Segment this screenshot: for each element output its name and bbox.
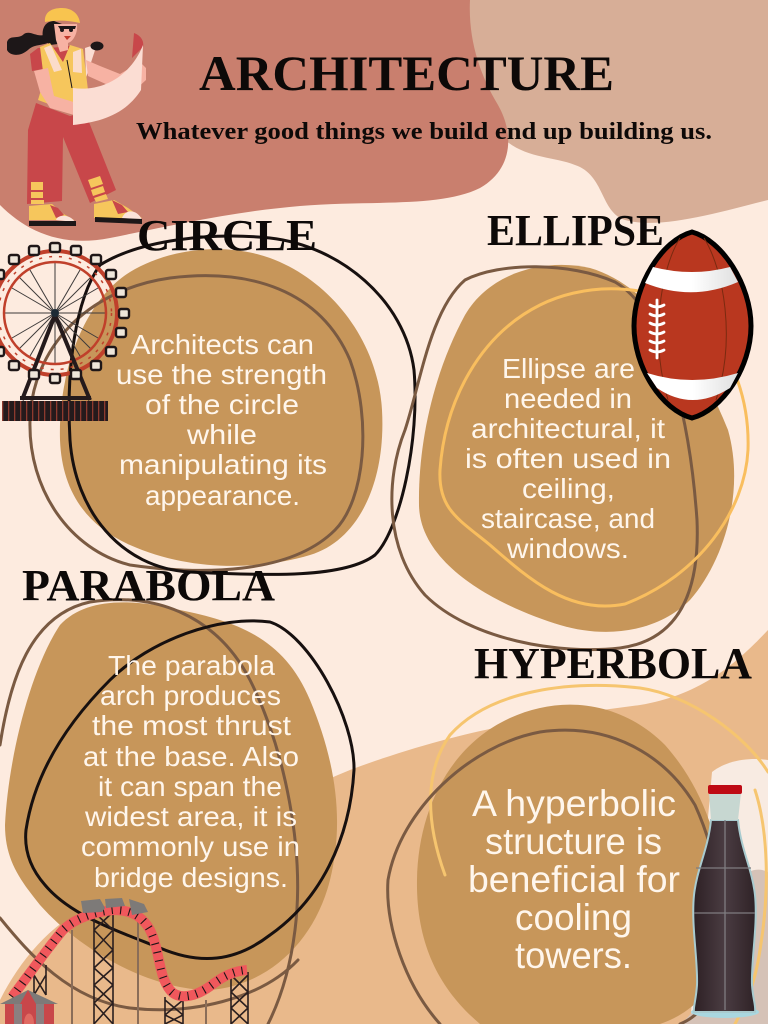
circle body text: while (186, 419, 257, 450)
parabola heading: PARABOLA (22, 561, 275, 610)
parabola outline: brown (0, 600, 298, 1024)
wheel base (2, 401, 108, 421)
ball body (634, 232, 751, 418)
icon: roller coaster (0, 898, 248, 1024)
blueprint (132, 33, 143, 58)
bottle bands (694, 820, 755, 1010)
coaster support poles (72, 918, 206, 1024)
left arm (34, 68, 84, 115)
parabola body text: The parabola (108, 650, 275, 681)
hyperbola heading: HYPERBOLA (474, 639, 752, 688)
subtitle: Whatever good things we build end up building us. (136, 119, 712, 145)
panel: circle (30, 211, 415, 574)
hyperbola outline: brown (388, 730, 722, 1024)
hyperbola blob (417, 705, 725, 1024)
panel: hyperbola (388, 639, 768, 1024)
ellipse body text: architectural, it (471, 413, 665, 444)
hyperbola body text: beneficial for (468, 859, 680, 900)
coaster towers (34, 912, 248, 1024)
coaster cars (81, 898, 148, 915)
circle outline: black (69, 236, 415, 574)
hyperbola body text: towers. (515, 935, 632, 976)
icon: architect worker (7, 8, 146, 226)
circle body text: of the circle (145, 389, 299, 420)
icon: ferris wheel (0, 243, 129, 421)
hyperbola body text (468, 783, 680, 976)
circle outline: brown (30, 276, 363, 570)
boots (29, 200, 142, 220)
circle blob (60, 249, 382, 566)
circle body text: use the strength (116, 359, 327, 390)
icon: football (634, 232, 751, 418)
panel: parabola (0, 561, 354, 1024)
circle body text: manipulating its (119, 449, 327, 480)
background shape: top right blush blob (464, 0, 768, 223)
circle heading: CIRCLE (137, 211, 317, 260)
hyperbola body text: cooling (515, 897, 632, 938)
vest (38, 43, 88, 113)
background shape: lower right grey blob (680, 870, 768, 1024)
bottle glass (693, 820, 756, 1012)
wheel rings (4, 262, 106, 364)
circle body text (116, 329, 327, 511)
ellipse body text: Ellipse are (502, 353, 635, 384)
ball seams (659, 238, 726, 400)
background shape: top left terracotta blob (0, 0, 508, 241)
parabola body text: arch produces (100, 680, 281, 711)
bottle neck (709, 793, 741, 820)
wheel spokes (4, 262, 106, 364)
parabola body text: it can span the (98, 771, 282, 802)
boot stripes (31, 176, 108, 204)
neck and face (54, 24, 77, 52)
ellipse body text: ceiling, (522, 473, 615, 504)
wheel gondolas (0, 243, 129, 383)
wheel support legs (20, 315, 91, 400)
bottle cap (708, 785, 742, 794)
rolled paper (85, 44, 97, 78)
hyperbola outline: yellow (431, 685, 768, 1024)
carnival tent (0, 990, 58, 1024)
parabola body text: widest area, it is (84, 801, 297, 832)
sleeve and shirt (30, 46, 70, 71)
circle body text: appearance. (145, 480, 300, 511)
parabola body text (81, 650, 300, 893)
ellipse outline: brown (392, 267, 697, 650)
panel: ellipse (392, 206, 748, 650)
ellipse body text: windows. (506, 533, 629, 564)
parabola outline: black (26, 621, 354, 959)
pants (27, 103, 116, 204)
hard hat (45, 8, 80, 23)
ellipse outline: yellow (440, 289, 748, 606)
title: ARCHITECTURE (199, 45, 614, 101)
parabola body text: commonly use in (81, 831, 300, 862)
ellipse body text: is often used in (465, 443, 671, 474)
circle body text: Architects can (131, 329, 314, 360)
ball stripes (645, 267, 738, 292)
hyperbola body text: A hyperbolic (472, 783, 676, 824)
ball laces (650, 300, 664, 358)
ellipse body text: needed in (504, 383, 632, 414)
bottle shadow base (691, 1006, 759, 1018)
background shape: lower tan wave (0, 630, 768, 1024)
ellipse heading: ELLIPSE (487, 206, 664, 255)
parabola body text: bridge designs. (94, 862, 288, 893)
hyperbola body text: structure is (485, 821, 662, 862)
parabola body text: at the base. Also (83, 741, 299, 772)
ellipse body text (465, 353, 671, 564)
right arm (86, 60, 146, 90)
ponytail (7, 33, 50, 55)
background shape: lower right pale blob (690, 759, 768, 1024)
icon: cola bottle (691, 785, 759, 1018)
parabola blob (5, 602, 337, 990)
parabola body text: the most thrust (92, 710, 291, 741)
ellipse body text: staircase, and (481, 503, 655, 534)
ellipse blob (419, 265, 734, 632)
coaster track (12, 910, 247, 997)
head hair (43, 21, 62, 45)
